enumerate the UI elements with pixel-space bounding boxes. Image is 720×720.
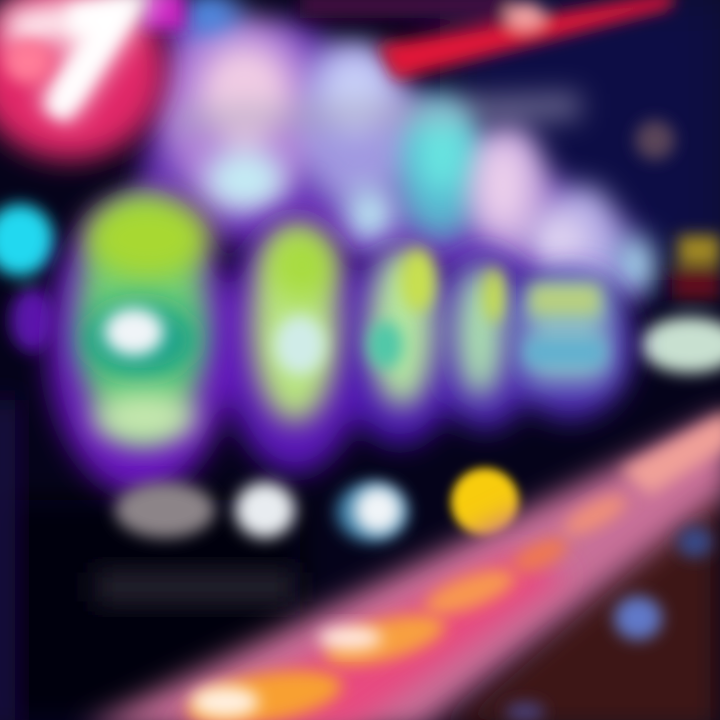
reel 2 (251, 227, 339, 423)
reel 3 (367, 248, 436, 408)
reel 5 (522, 280, 612, 385)
bottom-right brown floor (440, 480, 720, 720)
yellow button (451, 468, 519, 536)
distant lights (635, 120, 720, 373)
floor lights (505, 526, 713, 720)
button row (95, 468, 519, 602)
purple reel surrounds (48, 195, 634, 495)
upper row highlights (170, 0, 655, 295)
lit diagonal counter strip (80, 410, 720, 720)
top-right red bar (300, 0, 675, 80)
reel 1 (76, 198, 210, 442)
top-left red seven sign (0, 0, 185, 160)
reel 4 (454, 266, 506, 398)
upper machine glow (130, 10, 640, 300)
cyan lamp left (0, 204, 54, 352)
